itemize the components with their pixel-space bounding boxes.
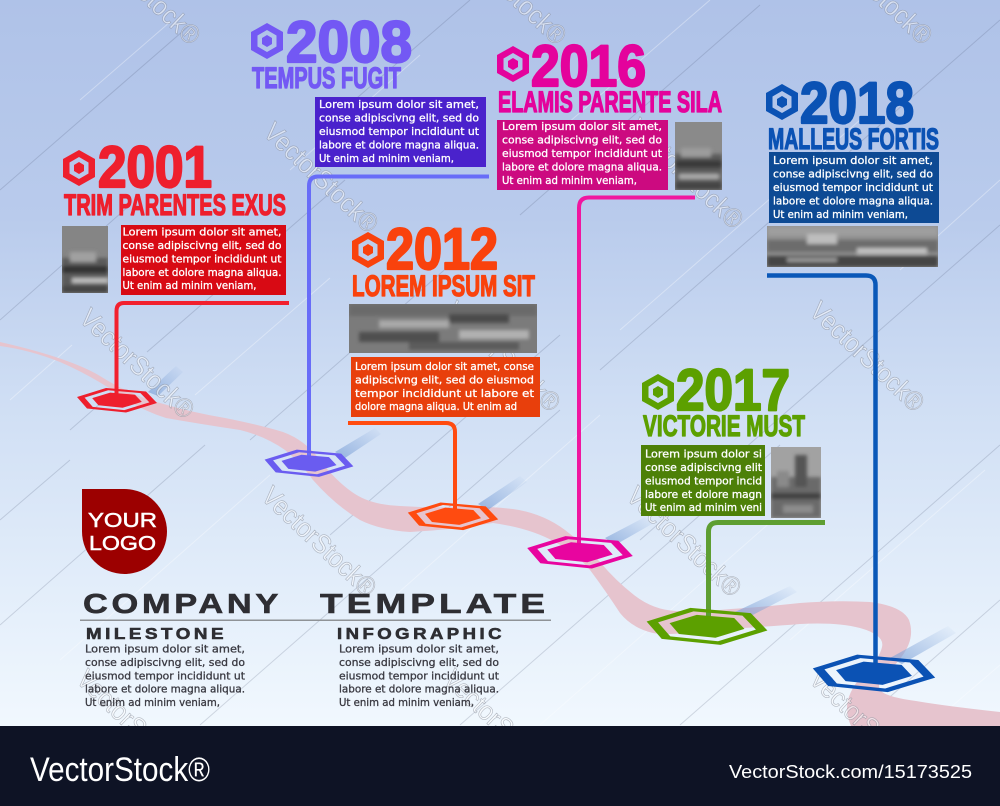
icon: 2012 hexagon <box>352 232 384 268</box>
text box 2001: Lorem ipsum dolor sit amet, <box>122 226 282 238</box>
text box 2001: eiusmod tempor incididunt ut <box>122 253 282 265</box>
column: milestone: Ut enim ad minim veniam, <box>85 697 220 709</box>
heading: tempus fugit: TEMPUS FUGIT <box>252 62 401 95</box>
text box 2008: Lorem ipsum dolor sit amet, <box>319 99 479 111</box>
heading: lorem ipsum sit: LOREM IPSUM SIT <box>352 270 535 303</box>
year 2017: 2017 <box>676 358 790 423</box>
milestone 2018 <box>766 71 939 692</box>
text box 2008: eiusmod tempor incididunt ut <box>319 126 479 138</box>
marker 2018 <box>813 655 935 692</box>
text box 2017: eiusmod tempor incid <box>645 475 762 487</box>
year 2018: 2018 <box>800 71 914 136</box>
watermarks: VectorStock® <box>256 481 382 603</box>
column: infographic: INFOGRAPHIC <box>337 626 505 643</box>
column: milestone: MILESTONE <box>86 626 227 643</box>
column: milestone: eiusmod tempor incididunt ut <box>85 670 245 682</box>
text box 2018: conse adipiscivng elit, sed do <box>773 168 933 180</box>
column: milestone: conse adipiscivng elit, sed do <box>85 657 245 669</box>
connector 2008 <box>309 176 489 462</box>
photo 2017 <box>771 447 821 518</box>
column: infographic: conse adipiscivng elit, sed do <box>339 657 499 669</box>
marker 2001 <box>77 388 157 412</box>
column: milestone: Lorem ipsum dolor sit amet, <box>85 644 245 656</box>
logo badge: LOGO <box>89 533 156 555</box>
text box 2001: labore et dolore magna aliqua. <box>122 267 282 279</box>
text box 2016: conse adipiscivng elit, sed do <box>502 134 662 146</box>
year 2008: 2008 <box>286 10 412 75</box>
text box 2018 <box>769 152 939 223</box>
icon: 2016 hexagon <box>497 46 529 82</box>
connector 2001 <box>116 303 289 398</box>
company title: COMPANY <box>83 588 282 619</box>
text box 2012 <box>351 357 540 417</box>
text box 2018: Ut enim ad minim veniam, <box>773 209 908 221</box>
text box 2018: Lorem ipsum dolor sit amet, <box>773 155 933 167</box>
heading: victorie must: VICTORIE MUST <box>643 410 805 443</box>
text box 2001: Ut enim ad minim veniam, <box>122 280 256 292</box>
marker 2008 <box>265 450 353 477</box>
text box 2012: dolore magna aliqua. Ut enim ad <box>355 401 517 413</box>
connector 2018 <box>767 276 876 664</box>
column: milestone: labore et dolore magna aliqua. <box>85 684 245 696</box>
photo 2012 <box>349 304 537 353</box>
column: infographic: labore et dolore magna aliqua. <box>339 684 499 696</box>
milestone 2008 <box>251 10 489 477</box>
photo 2018 <box>767 226 938 267</box>
watermarks: VectorStock® <box>804 664 930 786</box>
watermarks: VectorStock® <box>804 296 930 418</box>
icon: 2001 hexagon <box>63 150 95 186</box>
text box 2012: Lorem ipsum dolor sit amet, conse <box>355 361 534 373</box>
milestone 2017 <box>641 358 825 645</box>
text box 2012: adipiscivng elit, sed do eiusmod <box>355 374 534 386</box>
winding road <box>0 342 1000 726</box>
icon: 2008 hexagon <box>251 23 283 59</box>
logo badge: YOUR <box>88 510 157 532</box>
year 2012: 2012 <box>386 217 498 282</box>
column: infographic: eiusmod tempor incididunt ut <box>339 670 499 682</box>
watermarks: VectorStock® <box>623 113 749 235</box>
logo badge <box>82 489 167 574</box>
column: infographic <box>337 626 505 709</box>
streak shadows <box>148 366 956 664</box>
watermarks: VectorStock® <box>621 481 747 603</box>
text box 2018: labore et dolore magna aliqua. <box>773 195 933 207</box>
milestone 2016 <box>497 34 722 568</box>
watermarks: VectorStock® <box>74 303 200 425</box>
icon: 2018 hexagon <box>766 84 798 120</box>
text box 2017: Lorem ipsum dolor si <box>645 448 762 460</box>
text box 2016: labore et dolore magna aliqua. <box>502 161 662 173</box>
text box 2017: Ut enim ad minim veni <box>645 502 762 514</box>
text box 2017: labore et dolore magn <box>645 489 762 501</box>
milestone 2001 <box>62 135 289 412</box>
text box 2016: eiusmod tempor incididunt ut <box>502 148 662 160</box>
column: infographic: Ut enim ad minim veniam, <box>339 697 474 709</box>
marker 2017 <box>647 608 767 645</box>
text box 2016: Lorem ipsum dolor sit amet, <box>502 121 662 133</box>
year 2001: 2001 <box>98 135 212 200</box>
icon: 2017 hexagon <box>642 374 674 410</box>
footer band <box>0 726 1000 806</box>
company title <box>80 588 551 621</box>
text box 2016 <box>497 120 668 190</box>
connector 2012 <box>348 423 455 515</box>
watermarks: VectorStock® <box>440 296 566 418</box>
watermarks: VectorStock® <box>71 664 197 786</box>
watermarks: VectorStock® <box>258 117 384 239</box>
year 2016: 2016 <box>531 34 646 99</box>
text box 2008: conse adipiscivng elit, sed do <box>319 112 479 124</box>
marker 2016 <box>527 536 633 568</box>
text box 2001: conse adipiscivng elit, sed do <box>122 240 282 252</box>
text box 2001 <box>121 225 286 295</box>
text box 2017: conse adipiscivng elit <box>645 462 762 474</box>
photo 2016 <box>675 122 722 190</box>
heading: elamis parente sila: ELAMIS PARENTE SILA <box>498 86 722 119</box>
watermarks: VectorStock® <box>438 664 564 786</box>
photo 2001 <box>62 226 108 293</box>
connector 2016 <box>579 198 695 553</box>
column: milestone <box>85 626 245 709</box>
text box 2017 <box>641 445 765 516</box>
text box 2016: Ut enim ad minim veniam, <box>502 175 637 187</box>
text box 2008: labore et dolore magna aliqua. <box>319 139 479 151</box>
footer band: VectorStock.com/15173525 <box>729 762 972 782</box>
column: infographic: Lorem ipsum dolor sit amet, <box>339 644 499 656</box>
text box 2018: eiusmod tempor incididunt ut <box>773 182 933 194</box>
footer band: VectorStock® <box>30 751 210 789</box>
text box 2008 <box>315 97 486 167</box>
company title: TEMPLATE <box>320 588 549 619</box>
text box 2012: tempor incididunt ut labore et <box>355 388 534 400</box>
heading: trim parentes exus: TRIM PARENTES EXUS <box>64 189 286 222</box>
text box 2008: Ut enim ad minim veniam, <box>319 153 454 165</box>
milestone 2012 <box>348 217 540 530</box>
connector 2017 <box>708 522 825 628</box>
marker 2012 <box>408 502 498 530</box>
